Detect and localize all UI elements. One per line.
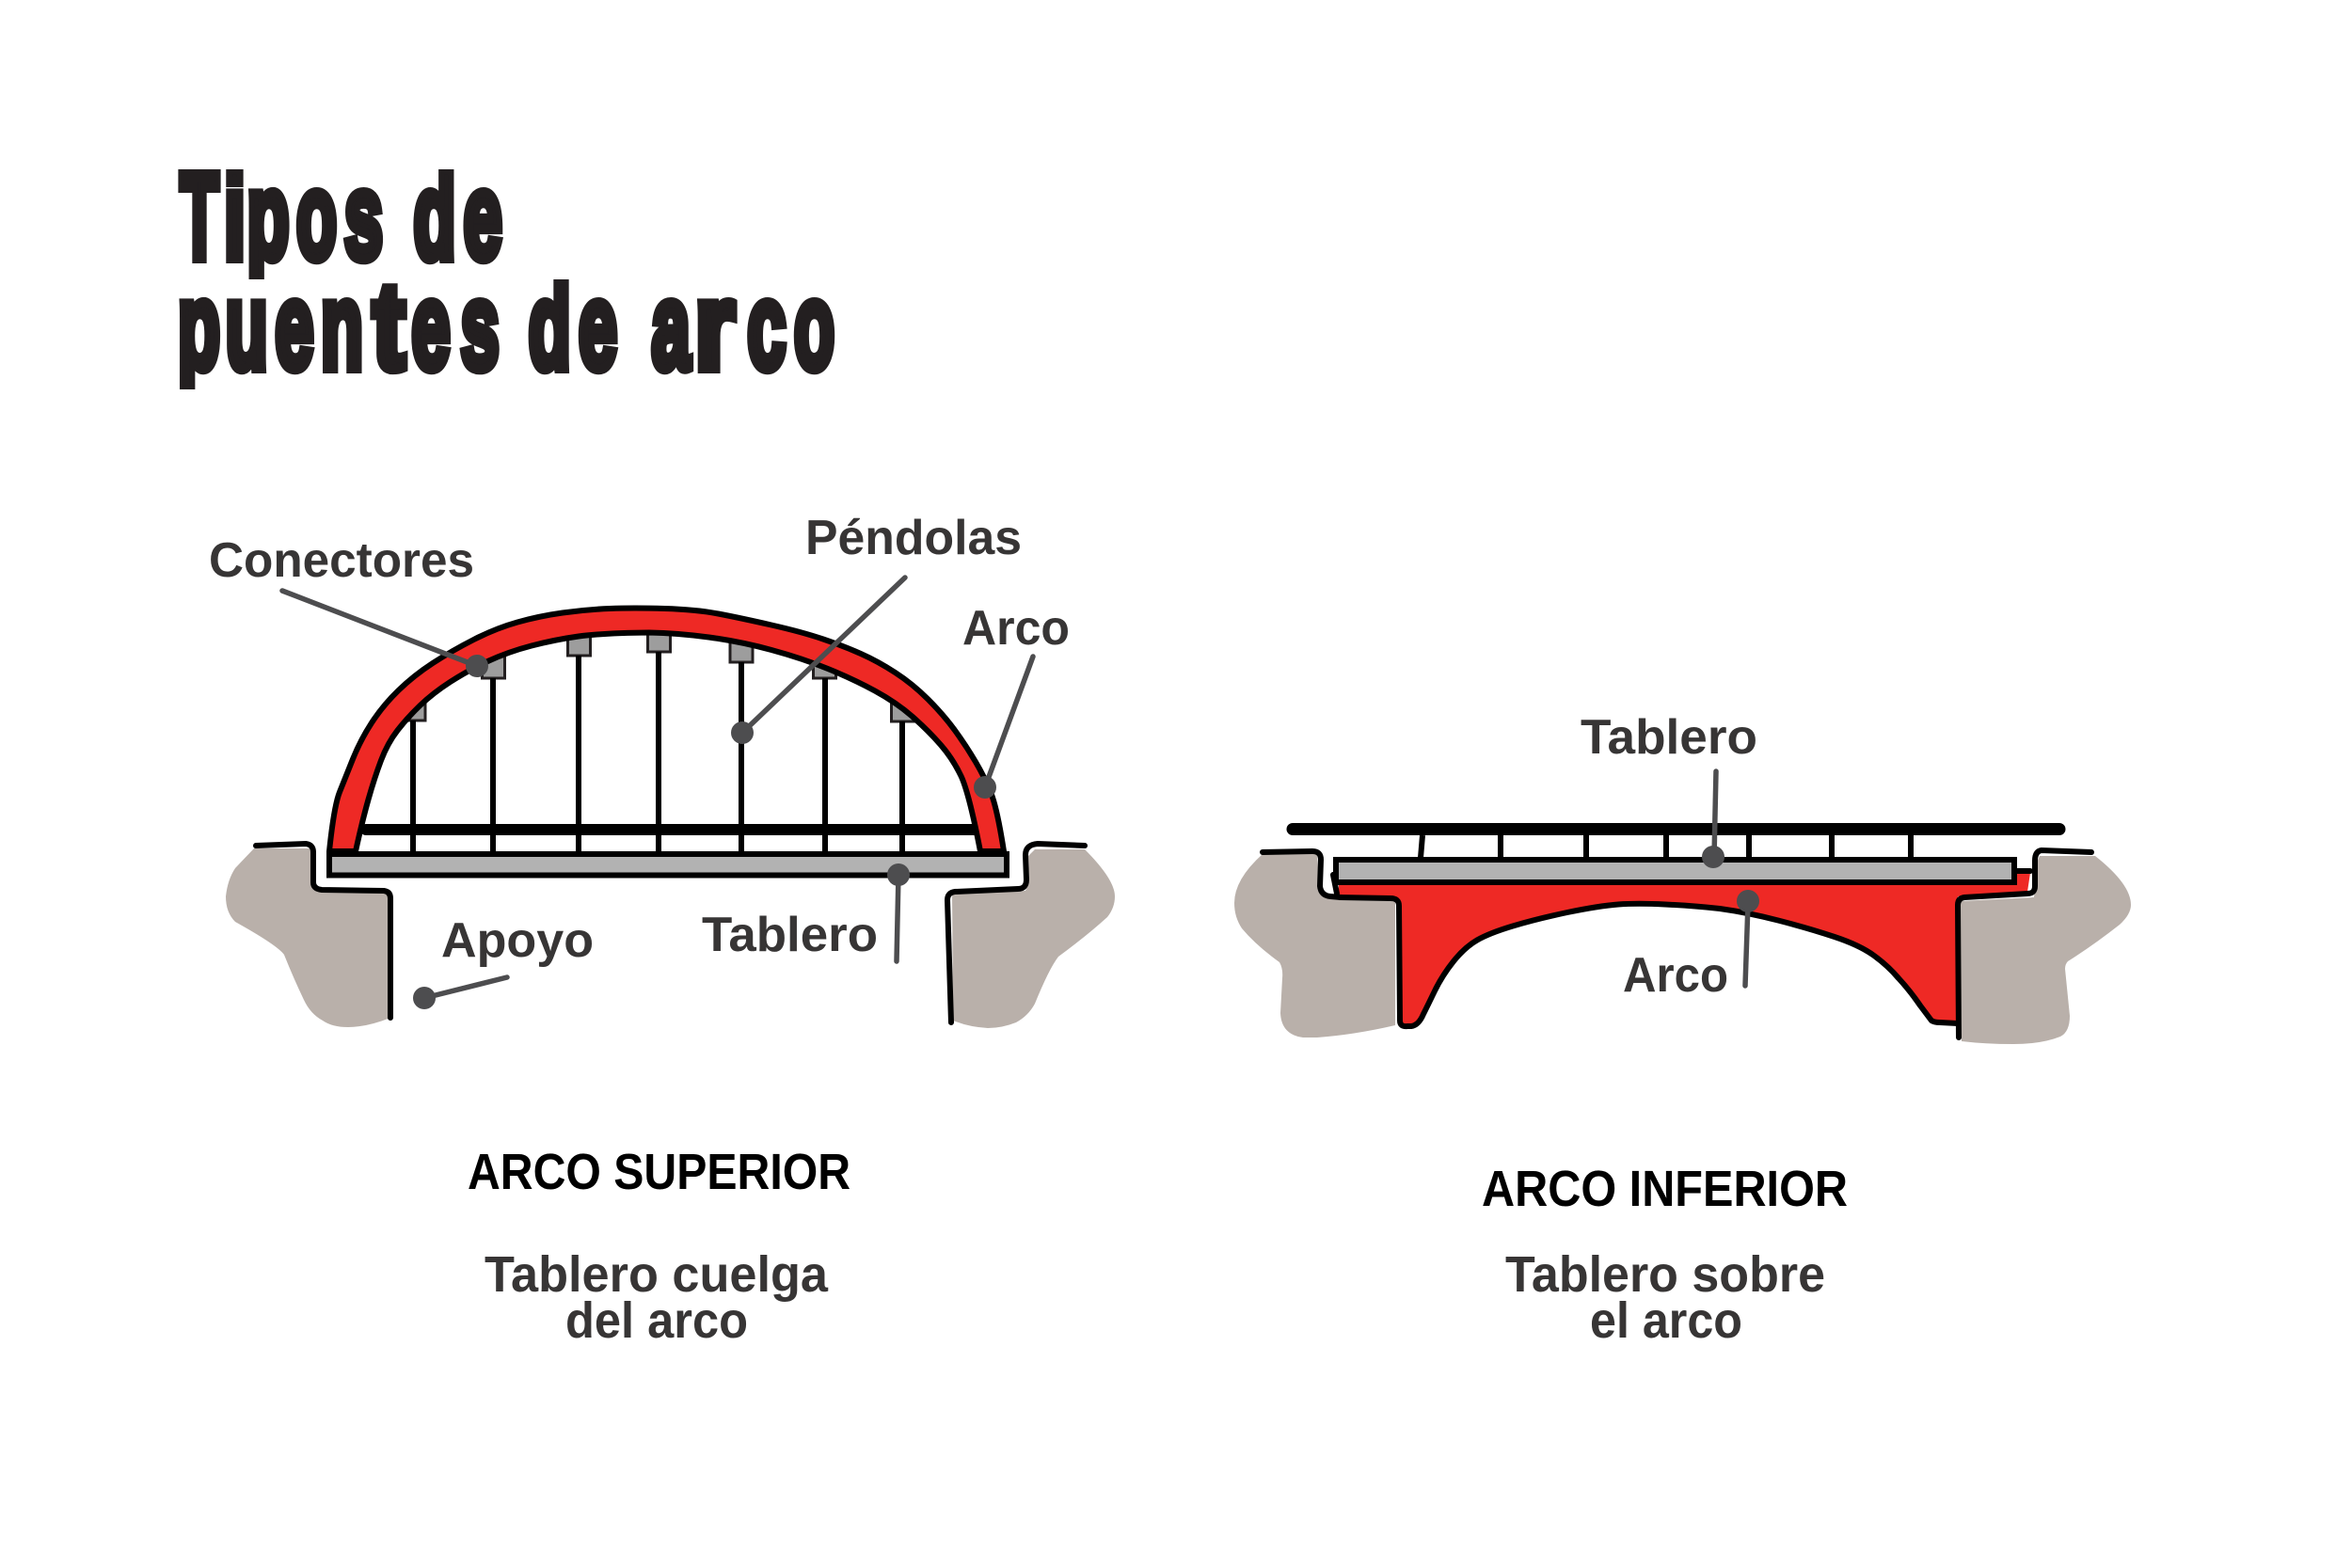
arch outline: [1339, 897, 1958, 1026]
text block: arco inferior description: el arco: [1590, 1292, 1742, 1349]
title: s: [344, 147, 383, 284]
title: s: [461, 258, 500, 395]
title: o: [794, 258, 834, 395]
callout: Tablero superior: Tablero: [702, 908, 878, 962]
connectors: [403, 626, 914, 721]
title: p: [246, 147, 290, 284]
callout: Péndolas: [731, 511, 1022, 744]
callout: Conectores: [209, 533, 488, 677]
text block: arco inferior description: [1505, 1246, 1825, 1349]
text block: arco superior description: del arco: [565, 1292, 748, 1349]
hangers (péndolas): [413, 652, 902, 854]
upper rail: [366, 824, 976, 835]
callout: Apoyo: Apoyo: [441, 913, 594, 968]
callout: Arco inferior: Arco: [1623, 948, 1728, 1003]
title: e: [579, 258, 617, 395]
left abutment: [1234, 854, 1395, 1037]
panel: arco superior bridge: [226, 608, 1115, 1028]
title: c: [747, 258, 786, 395]
title: e: [464, 147, 502, 284]
heading: ARCO SUPERIOR: ARCO SUPERIOR: [468, 1144, 850, 1200]
title: T: [181, 147, 218, 284]
deck (tablero): [1336, 860, 2014, 882]
callout: Arco inferior: [1623, 890, 1759, 1003]
callout: Péndolas: Péndolas: [805, 511, 1022, 565]
right abutment: [1960, 856, 2131, 1044]
title: i: [224, 147, 246, 284]
title: t: [373, 258, 405, 395]
title: r: [695, 258, 735, 395]
text block: arco superior description: [485, 1246, 829, 1349]
title: d: [414, 147, 455, 284]
callout: Tablero inferior: [1581, 710, 1757, 868]
title: e: [412, 258, 450, 395]
title: u: [226, 258, 268, 395]
callout: Arco superior: [962, 601, 1070, 799]
text block: arco inferior description: Tablero sobre: [1505, 1246, 1825, 1303]
title: p: [178, 258, 220, 395]
abutment outlines: [1263, 850, 2091, 1037]
deck (tablero): [329, 854, 1007, 875]
panel: arco inferior bridge: [1234, 830, 2131, 1044]
right abutment: [947, 844, 1115, 1028]
heading: ARCO INFERIOR: ARCO INFERIOR: [1482, 1161, 1848, 1217]
callout: Arco superior: Arco: [962, 601, 1070, 656]
callout: Tablero superior: [702, 863, 910, 962]
callout: Conectores: Conectores: [209, 533, 474, 588]
callout: Apoyo: [413, 913, 594, 1009]
callout: Tablero inferior: Tablero: [1581, 710, 1757, 765]
title: n: [321, 258, 363, 395]
title: a: [652, 258, 691, 395]
text block: arco superior description: Tablero cuelga: [485, 1246, 829, 1303]
left abutment: [226, 844, 390, 1027]
title: o: [296, 147, 337, 284]
title: e: [275, 258, 313, 395]
upper rail: [1293, 823, 2059, 835]
red arch body: [1339, 873, 2030, 1026]
title: d: [529, 258, 571, 395]
arch: [329, 608, 1004, 851]
title: [178, 169, 835, 389]
spandrel columns: [1421, 835, 1911, 858]
